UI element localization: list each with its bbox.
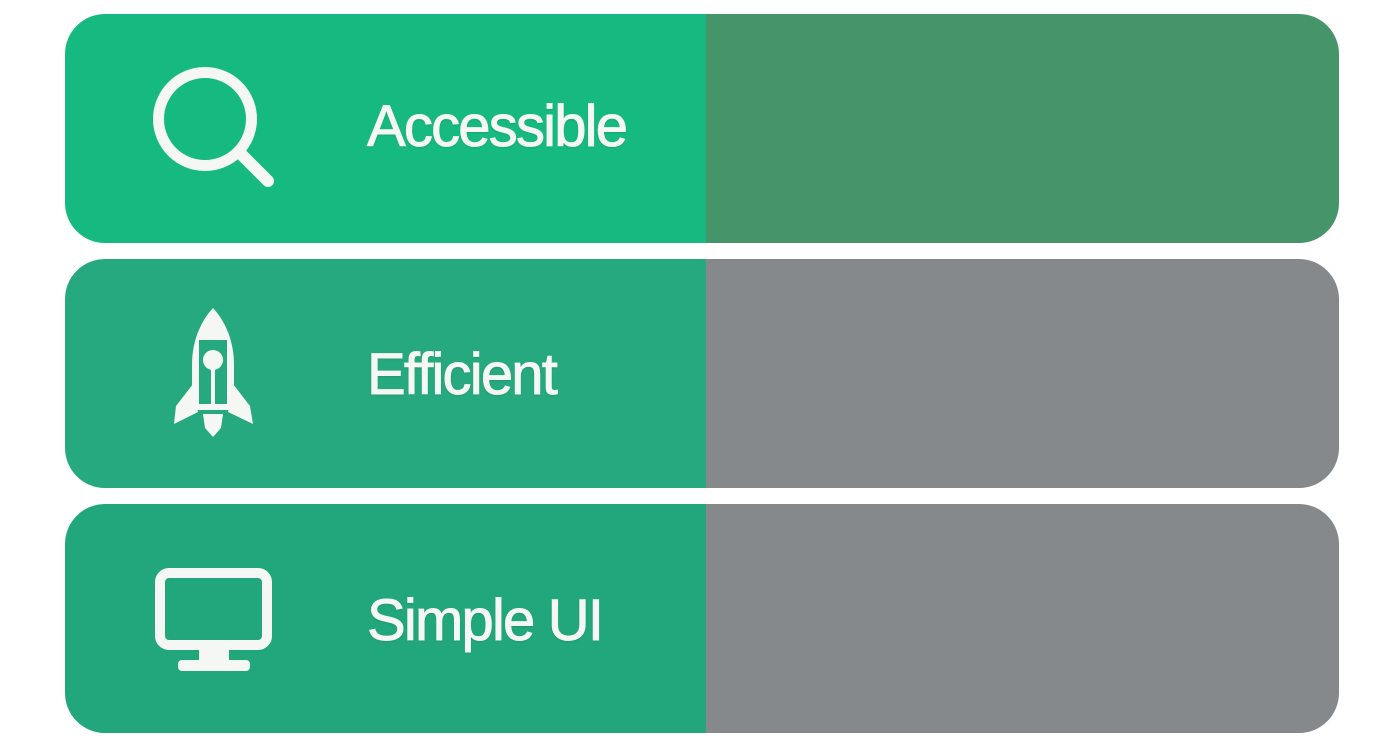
row: simple UI xyxy=(65,504,1339,733)
label: Accessible: Accessible xyxy=(367,94,626,159)
label: Simple UI: Simple UI xyxy=(367,588,602,653)
row: efficient xyxy=(65,259,1339,488)
label: Efficient: Efficient xyxy=(367,342,556,407)
icon: magnifier xyxy=(153,67,274,187)
row: accessible xyxy=(65,14,1339,243)
icon: monitor xyxy=(155,568,272,671)
icon: rocket xyxy=(174,308,253,437)
